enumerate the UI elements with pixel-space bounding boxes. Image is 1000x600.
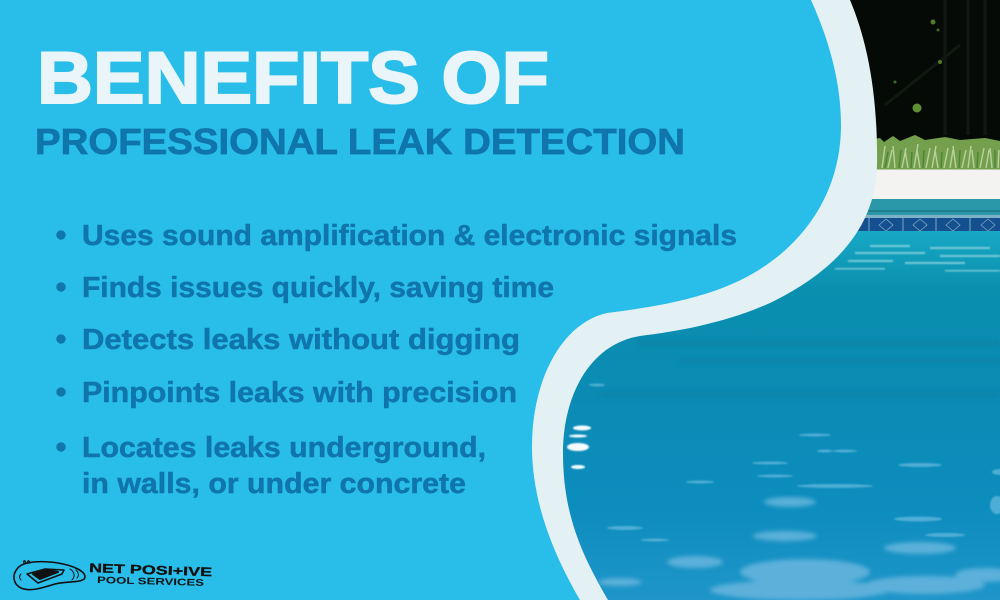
photo: surface glints [835, 245, 1000, 272]
photo: tile band [850, 218, 1000, 231]
logo: net positive pool services [14, 561, 212, 590]
bullet 5: Locates leaks underground, [82, 432, 486, 464]
photo: thin ripple streaks [589, 384, 1000, 542]
bullet 4: Pinpoints leaks with precision [82, 377, 517, 409]
bullet 3: Detects leaks without digging [82, 324, 520, 356]
photo: ripples [598, 497, 1000, 600]
photo: pool wall [850, 199, 1000, 215]
title [35, 38, 685, 162]
photo: main water [540, 285, 1000, 600]
photo: dark ripple bands [600, 340, 1000, 397]
bullet 2: Finds issues quickly, saving time [82, 272, 554, 304]
photo: sun glare [567, 426, 591, 469]
logo text: net positive: NET POSI+IVE [89, 561, 212, 579]
photo: grass [860, 135, 1000, 170]
light curved band [500, 0, 877, 600]
bullet 5 [56, 432, 486, 500]
logo text: pool services: POOL SERVICES [97, 575, 204, 589]
pool photo background [540, 0, 1000, 600]
photo: pool deck [860, 170, 1000, 200]
photo: upper water [780, 231, 1000, 291]
heading: professional leak detection: PROFESSIONAL LEAK DETECTION [35, 121, 685, 162]
photo: grass highlights [882, 144, 999, 168]
icon: pool outline with float [14, 561, 85, 590]
heading: benefits of: BENEFITS OF [37, 38, 549, 119]
bullet 5: in walls, or under concrete [82, 468, 466, 500]
photo: dark trees [780, 0, 1000, 142]
benefits list [56, 220, 737, 500]
bullet 1: Uses sound amplification & electronic signals [82, 220, 737, 252]
